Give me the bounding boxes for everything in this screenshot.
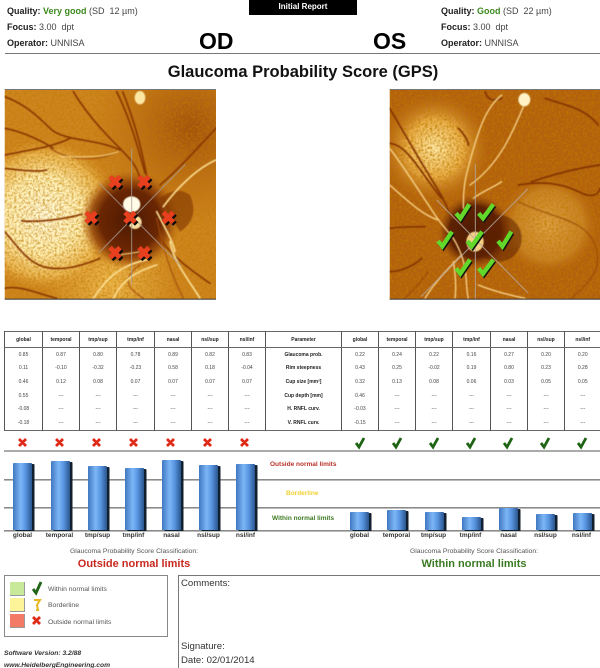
parameter table: ---: [544, 420, 548, 426]
parameter table: ---: [208, 420, 212, 426]
OS bar labels: [350, 532, 592, 539]
parameter table: Cup size [mm²]: [286, 379, 321, 385]
parameter table: 0.12: [56, 379, 66, 385]
zone label: outside: Outside normal limits: [270, 461, 336, 468]
parameter table: ---: [133, 406, 138, 412]
parameter table: nsl/sup: [537, 336, 555, 342]
parameter table: 0.46: [355, 393, 365, 399]
parameter table: 0.20: [541, 352, 551, 358]
fundus image OD with outside-limits markers: [4, 89, 216, 300]
parameter table: 0.08: [429, 379, 439, 385]
parameter table: 0.25: [392, 365, 402, 371]
parameter table: 0.80: [93, 352, 103, 358]
parameter table: ---: [208, 406, 212, 412]
red cross markers: [86, 177, 175, 259]
parameter table: 0.58: [168, 365, 178, 371]
header info: right eye: Quality: Very good (SD 12 µm): [7, 6, 138, 16]
parameter table: ---: [96, 406, 100, 412]
legend: Within normal limits: [48, 586, 107, 593]
parameter table: ---: [96, 393, 100, 399]
parameter table: 0.19: [467, 365, 476, 371]
eye label OD: OD: [199, 28, 234, 54]
classification OD: Outside normal limits: [78, 558, 190, 570]
parameter table: tmp/inf: [463, 336, 480, 342]
report type badge: [249, 0, 357, 15]
parameter table: 0.28: [578, 365, 588, 371]
parameter table: 0.11: [19, 365, 28, 371]
parameter table: ---: [133, 420, 138, 426]
comments box: [178, 575, 600, 668]
OD bar labels: [13, 532, 256, 539]
bar chart: [4, 479, 600, 532]
parameter table: 0.43: [355, 365, 365, 371]
OS bar labels: global: [350, 532, 369, 539]
OD bar labels: temporal: [46, 532, 73, 539]
parameter table: 0.07: [205, 379, 215, 385]
parameter table: 0.07: [242, 379, 252, 385]
parameter table: V. RNFL curv.: [288, 420, 319, 426]
header info: left eye: Operator: UNNISA: [441, 38, 519, 48]
parameter table: Rim steepness: [286, 365, 321, 371]
parameter table: 0.83: [242, 352, 252, 358]
OS bar labels: nsl/sup: [534, 532, 557, 539]
parameter table: 0.87: [56, 352, 66, 358]
parameter table: 0.07: [131, 379, 140, 385]
parameter table: ---: [244, 420, 250, 426]
parameter table: global: [353, 336, 367, 342]
classification OD: [70, 548, 198, 570]
OS bar labels: temporal: [383, 532, 410, 539]
parameter table: tmp/inf: [127, 336, 144, 342]
parameter table: Cup depth [mm]: [284, 393, 323, 399]
parameter table: ---: [580, 393, 585, 399]
parameter table: 0.22: [355, 352, 365, 358]
parameter table: 0.23: [541, 365, 551, 371]
comments box: Signature:: [181, 641, 225, 652]
parameter table: nasal: [167, 336, 179, 342]
parameter table: H. RNFL curv.: [287, 406, 320, 412]
parameter table: 0.13: [392, 379, 402, 385]
parameter table: 0.20: [578, 352, 588, 358]
parameter table: ---: [244, 393, 250, 399]
parameter table: temporal: [386, 336, 408, 342]
parameter table: temporal: [50, 336, 72, 342]
parameter table: -0.15: [354, 420, 366, 426]
classification OS: Within normal limits: [421, 558, 526, 570]
parameter table: ---: [394, 393, 400, 399]
parameter table: 0.78: [131, 352, 140, 358]
parameter table: -0.23: [130, 365, 141, 371]
OD bar labels: global: [13, 532, 32, 539]
parameter table: tmp/sup: [88, 336, 108, 342]
zone label: borderline: Borderline: [286, 490, 319, 497]
parameter table: 0.85: [19, 352, 28, 358]
comments box: Date: 02/01/2014: [181, 655, 255, 666]
parameter table: ---: [394, 420, 400, 426]
parameter table: 0.07: [168, 379, 178, 385]
parameter table: ---: [170, 420, 176, 426]
parameter table: [4, 331, 600, 431]
OS bar labels: nasal: [500, 532, 517, 539]
parameter table: -0.03: [354, 406, 366, 412]
legend: [4, 575, 168, 637]
parameter table: 0.18: [205, 365, 215, 371]
eye label OS: OS: [373, 28, 406, 54]
software version: [4, 650, 110, 668]
parameter table: ---: [432, 420, 436, 426]
red crosses: [19, 439, 248, 446]
parameter table: 0.08: [93, 379, 103, 385]
title: Glaucoma Probability Score (GPS): [168, 63, 438, 81]
parameter table: ---: [208, 393, 212, 399]
OD bar labels: tmp/inf: [123, 532, 144, 539]
classification OS: Glaucoma Probability Score Classification:: [410, 548, 538, 555]
parameter table: nsl/inf: [240, 336, 254, 342]
parameter table: nsl/inf: [575, 336, 590, 342]
parameter table: ---: [506, 393, 512, 399]
classification OS: [410, 548, 538, 570]
OD bar labels: nasal: [163, 532, 180, 539]
parameter table: ---: [432, 393, 436, 399]
software version: Software Version: 3.2/88: [4, 650, 81, 657]
parameter table: -0.10: [55, 365, 67, 371]
parameter table: 0.80: [504, 365, 514, 371]
parameter table: ---: [58, 406, 64, 412]
parameter table: ---: [580, 420, 585, 426]
parameter table: 0.32: [355, 379, 365, 385]
header info: right eye: Focus: 3.00 dpt: [7, 22, 74, 32]
legend: Outside normal limits: [48, 619, 111, 626]
parameter table: ---: [580, 406, 585, 412]
parameter table: tmp/sup: [424, 336, 444, 342]
parameter table: ---: [170, 393, 176, 399]
parameter table: ---: [469, 406, 474, 412]
parameter table: 0.89: [168, 352, 178, 358]
comments box: Comments:: [181, 578, 230, 589]
parameter table: -0.02: [428, 365, 440, 371]
parameter table: global: [16, 336, 31, 342]
parameter table: Parameter: [291, 336, 316, 342]
parameter table: ---: [506, 420, 512, 426]
OD bar labels: nsl/sup: [197, 532, 220, 539]
OS bars: [350, 508, 594, 531]
parameter table: 0.05: [578, 379, 588, 385]
parameter table: 0.27: [504, 352, 514, 358]
status marks row: [18, 437, 588, 450]
parameter table: ---: [96, 420, 100, 426]
header info: left eye: Quality: Good (SD 22 µm): [441, 6, 552, 16]
parameter table: -0.18: [18, 420, 29, 426]
header info: left eye: [441, 6, 552, 48]
parameter table: nsl/sup: [201, 336, 219, 342]
parameter table: ---: [170, 406, 176, 412]
parameter table: 0.22: [429, 352, 439, 358]
parameter table: ---: [469, 420, 474, 426]
header info: right eye: [7, 6, 138, 48]
report type badge: Initial Report: [279, 2, 327, 11]
parameter table: ---: [469, 393, 474, 399]
parameter table: nasal: [503, 336, 515, 342]
parameter table: -0.32: [92, 365, 104, 371]
parameter table: -0.04: [241, 365, 253, 371]
header info: right eye: Operator: UNNISA: [7, 38, 85, 48]
parameter table: ---: [244, 406, 250, 412]
header info: left eye: Focus: 3.00 dpt: [441, 22, 508, 32]
parameter table: ---: [394, 406, 400, 412]
parameter table: 0.24: [392, 352, 402, 358]
parameter table: 0.46: [19, 379, 28, 385]
parameter table: ---: [432, 406, 436, 412]
parameter table: ---: [58, 420, 64, 426]
parameter table: Glaucoma prob.: [284, 352, 323, 358]
parameter table: -0.08: [18, 406, 29, 412]
classification OD: Glaucoma Probability Score Classification:: [70, 548, 198, 555]
parameter table: 0.06: [467, 379, 476, 385]
OD bar labels: nsl/inf: [236, 532, 255, 539]
parameter table: 0.55: [19, 393, 28, 399]
parameter table: ---: [58, 393, 64, 399]
zone label: within: Within normal limits: [272, 515, 334, 522]
legend: Borderline: [48, 602, 79, 609]
parameter table: 0.03: [504, 379, 514, 385]
green checks: [356, 438, 586, 447]
parameter table: 0.05: [541, 379, 551, 385]
green check markers: [438, 204, 512, 275]
parameter table: ---: [544, 393, 548, 399]
OS bar labels: tmp/inf: [460, 532, 481, 539]
OS bar labels: tmp/sup: [421, 532, 446, 539]
parameter table: 0.82: [205, 352, 215, 358]
OD bars: [13, 460, 258, 531]
parameter table: 0.16: [467, 352, 476, 358]
parameter table: ---: [506, 406, 512, 412]
OS bar labels: nsl/inf: [572, 532, 591, 539]
parameter table: ---: [544, 406, 548, 412]
OD bar labels: tmp/sup: [85, 532, 110, 539]
fundus image OS with within-limits markers: [390, 89, 600, 300]
parameter table: ---: [133, 393, 138, 399]
